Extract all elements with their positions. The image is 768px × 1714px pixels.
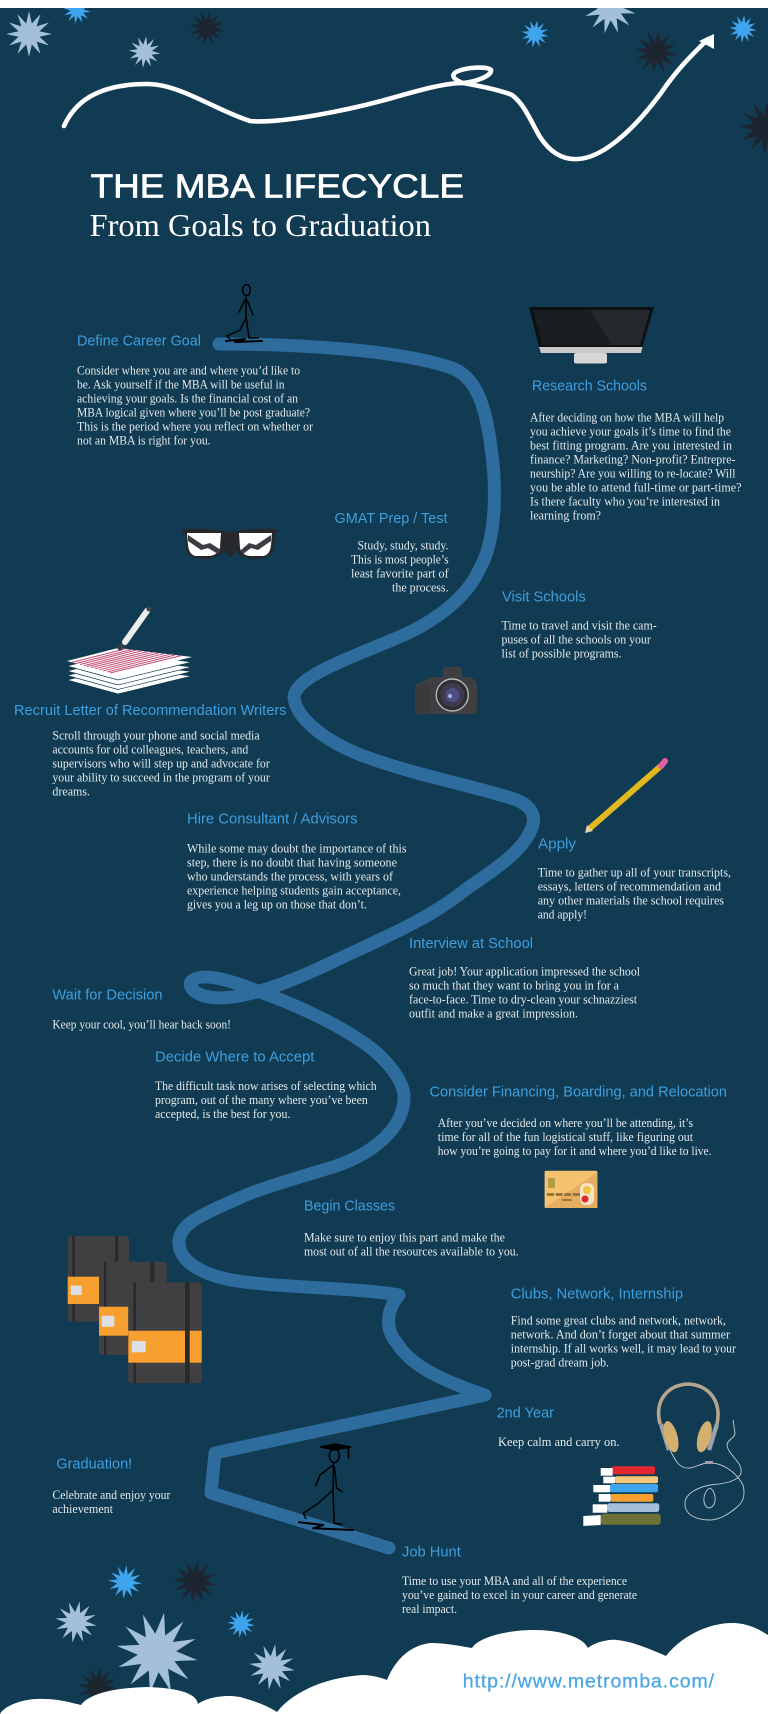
step: decide where to accept [155, 1049, 377, 1121]
body text: outfit and make a great impression. [409, 1006, 578, 1021]
icon: credit card [545, 1171, 597, 1208]
body text [187, 840, 406, 911]
body text: Time to use your MBA and all of the experience [402, 1573, 627, 1588]
body text: be. Ask yourself if the MBA will be useful in [77, 377, 285, 392]
body text: and apply! [538, 907, 587, 922]
website url: http://www.metromba.com/ [463, 1671, 715, 1693]
body text: supervisors who will step up and advocate for [52, 755, 270, 770]
top stars [6, 0, 768, 157]
step: job hunt [402, 1543, 637, 1616]
icon: headphones [659, 1384, 744, 1520]
body text: The difficult task now arises of selecting which [155, 1078, 377, 1093]
heading: Apply [538, 835, 576, 852]
body text: Is there faculty who you’re interested in [530, 494, 720, 509]
body text [409, 964, 640, 1021]
body text: learning from? [530, 508, 601, 523]
step: visit schools [502, 589, 657, 660]
body text: MBA logical given where you’ll be post graduate? [77, 405, 310, 420]
body text: finance? Marketing? Non-profit? Entrepre- [530, 452, 736, 467]
step: gmat prep [334, 510, 449, 594]
body text: neurship? Are you willing to re-locate? Will [530, 466, 736, 481]
step: recruit letter writers [14, 702, 286, 798]
body text: program, out of the many where you’ve been [155, 1092, 368, 1107]
body text: how you’re going to pay for it and where you’d like to live. [438, 1143, 712, 1158]
body text: experience helping students gain acceptance, [187, 882, 401, 897]
icon: stack of books [583, 1466, 661, 1526]
body text: accepted, is the best for you. [155, 1106, 290, 1121]
body text: This is the period where you reflect on whether or [77, 419, 314, 434]
body text: Great job! Your application impressed the school [409, 964, 640, 979]
body text: Keep calm and carry on. [498, 1434, 620, 1449]
heading: Hire Consultant / Advisors [187, 811, 358, 828]
step: 2nd year [497, 1404, 620, 1449]
body text: Consider where you are and where you’d like to [77, 363, 300, 378]
step: clubs network internship [511, 1286, 737, 1370]
body text: not an MBA is right for you. [77, 433, 211, 448]
heading: Clubs, Network, Internship [511, 1286, 683, 1303]
icon: computer monitor [529, 307, 654, 364]
body text: so much that they want to bring you in for a [409, 978, 619, 993]
body text [538, 865, 731, 922]
body text [530, 410, 742, 523]
heading: Recruit Letter of Recommendation Writers [14, 702, 286, 719]
body text: list of possible programs. [502, 645, 622, 660]
body text [351, 537, 449, 594]
white clouds [0, 1623, 768, 1714]
body text: any other materials the school requires [538, 893, 724, 908]
body text [511, 1313, 737, 1370]
body text: most out of all the resources available to you. [304, 1244, 519, 1259]
body text: Time to gather up all of your transcripts, [538, 865, 731, 880]
body text: achieving your goals. Is the financial cost of an [77, 391, 298, 406]
body text: achievement [52, 1501, 113, 1516]
heading: Consider Financing, Boarding, and Relocation [430, 1084, 727, 1101]
career path ribbon [179, 344, 534, 1548]
white squiggle arrow [62, 34, 714, 159]
heading: Interview at School [409, 935, 533, 952]
step: research schools [530, 378, 742, 523]
body text: real impact. [402, 1601, 457, 1616]
subtitle: From Goals to Graduation [90, 207, 431, 243]
body text [502, 617, 657, 660]
heading: Visit Schools [502, 589, 586, 606]
body text: This is most people’s [351, 551, 449, 566]
body text: essays, letters of recommendation and [538, 879, 721, 894]
step: consider financing [430, 1084, 727, 1158]
body text: Study, study, study. [358, 537, 448, 552]
heading: Decide Where to Accept [155, 1049, 315, 1066]
body text: After deciding on how the MBA will help [530, 410, 724, 425]
step: hire consultant [187, 811, 406, 911]
body text: accounts for old colleagues, teachers, and [52, 741, 249, 756]
heading: Graduation! [56, 1455, 132, 1472]
body text: gives you a leg up on those that don’t. [187, 896, 367, 911]
body text: the process. [392, 579, 449, 594]
body text: least favorite part of [351, 565, 449, 580]
body text: best fitting program. Are you interested in [530, 438, 732, 453]
body text [402, 1573, 637, 1616]
bottom stars [52, 1557, 298, 1709]
heading: Define Career Goal [77, 333, 201, 350]
body text: you’ve gained to excel in your career and generate [402, 1587, 637, 1602]
heading: Job Hunt [402, 1543, 462, 1560]
body text [77, 363, 314, 448]
body text [52, 1487, 171, 1516]
body text: puses of all the schools on your [502, 631, 651, 646]
body text [438, 1115, 712, 1158]
body text: Make sure to enjoy this part and make the [304, 1230, 505, 1245]
step: wait for decision [52, 986, 231, 1031]
body text: Find some great clubs and network, network, [511, 1313, 726, 1328]
body text: After you’ve decided on where you’ll be attending, it’s [438, 1115, 693, 1130]
body text: post-grad dream job. [511, 1355, 609, 1370]
icon: walking stick figure [226, 284, 262, 342]
body text: Scroll through your phone and social media [52, 727, 260, 742]
body text: dreams. [52, 783, 90, 798]
body text: Celebrate and enjoy your [52, 1487, 171, 1502]
icon: graduate stick figure [299, 1444, 353, 1530]
step: interview at school [409, 935, 640, 1021]
icon: stack of paper with pen [67, 606, 192, 694]
heading: Research Schools [532, 378, 647, 395]
heading: GMAT Prep / Test [334, 510, 448, 527]
body text: you achieve your goals it’s time to find the [530, 424, 731, 439]
body text: you be able to attend full-time or part-time? [530, 480, 742, 495]
body text: face-to-face. Time to dry-clean your schnazziest [409, 992, 637, 1007]
body text: network. And don’t forget about that summer [511, 1327, 731, 1342]
body text [304, 1230, 519, 1259]
body text: internship. If all works well, it may lead to your [511, 1341, 737, 1356]
step: define career goal [77, 333, 314, 448]
heading: Begin Classes [304, 1198, 395, 1215]
icon: glasses [181, 529, 279, 559]
icon: pencil [585, 761, 665, 833]
body text [155, 1078, 377, 1121]
body text: Keep your cool, you’ll hear back soon! [52, 1016, 231, 1031]
step: apply [538, 835, 731, 922]
step: graduation [52, 1455, 171, 1516]
title: THE MBA LIFECYCLE [91, 168, 464, 205]
heading: 2nd Year [497, 1404, 554, 1421]
body text: who understands the process, with years of [187, 868, 394, 883]
body text: time for all of the fun logistical stuff, like figuring out [438, 1129, 693, 1144]
body text: your ability to succeed in the program of your [52, 769, 270, 784]
icon: notebooks [68, 1236, 202, 1383]
icon: camera [415, 667, 477, 714]
body text: step, there is no doubt that having someone [187, 854, 397, 869]
step: begin classes [304, 1198, 519, 1259]
heading: Wait for Decision [52, 986, 163, 1003]
body text [52, 727, 270, 798]
body text: While some may doubt the importance of this [187, 840, 406, 855]
body text: Time to travel and visit the cam- [502, 617, 657, 632]
